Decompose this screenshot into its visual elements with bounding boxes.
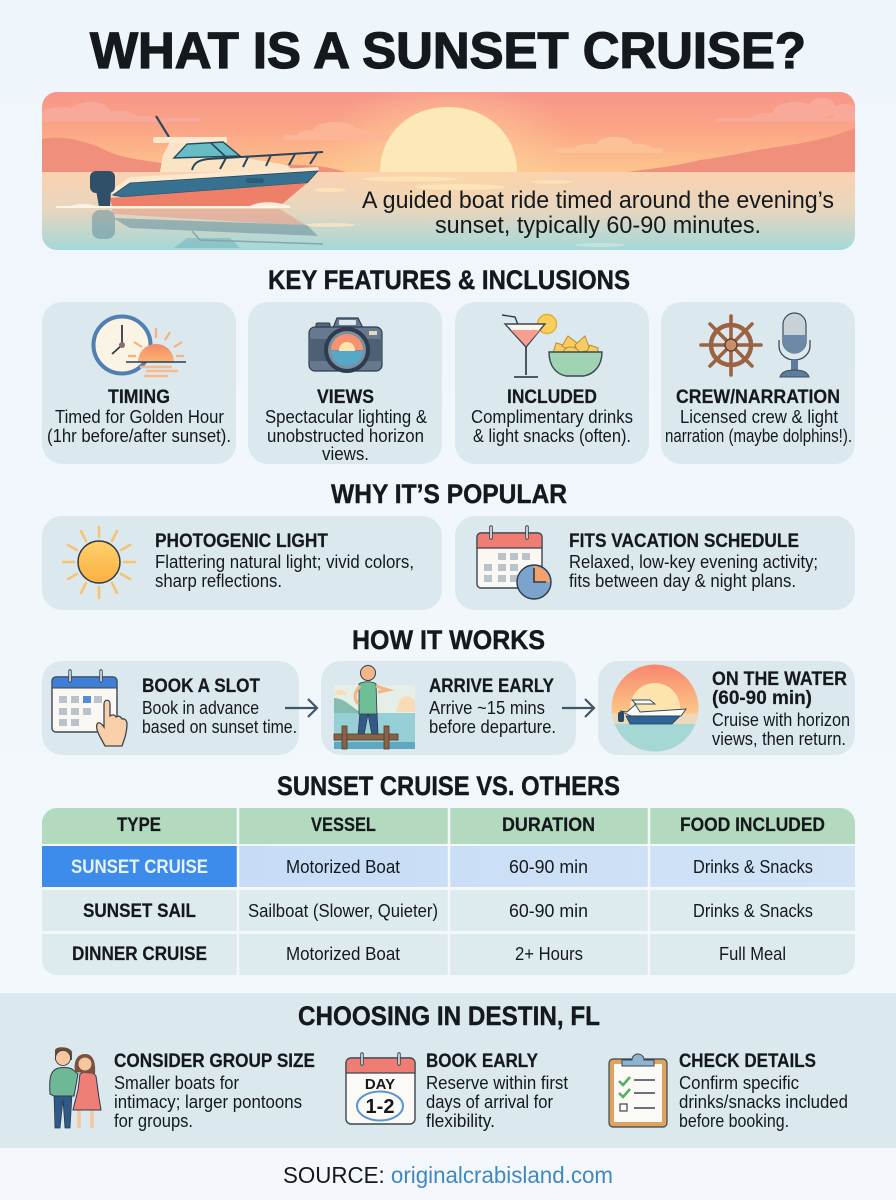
panel: photogenic light: PHOTOGENIC LIGHT bbox=[155, 531, 328, 552]
panel: fits vacation schedule: fits between day & night plans. bbox=[569, 571, 796, 591]
block: book early: days of arrival for bbox=[426, 1092, 553, 1112]
table row: sunset sail: Sailboat (Slower, Quieter) bbox=[248, 900, 438, 921]
block: book early: BOOK EARLY bbox=[426, 1051, 538, 1072]
panel: arrive early: Arrive ~15 mins bbox=[429, 698, 545, 718]
heading: why popular: WHY IT’S POPULAR bbox=[331, 479, 567, 509]
panel: arrive early: before departure. bbox=[429, 717, 556, 737]
source line: SOURCE: originalcrabisland.com bbox=[283, 1162, 613, 1188]
icon: calendar and clock bbox=[477, 527, 551, 599]
table row: sunset sail: Drinks & Snacks bbox=[693, 900, 813, 921]
panel: views: unobstructed horizon bbox=[267, 426, 424, 446]
panel: timing bbox=[42, 302, 236, 464]
panel: timing: Timed for Golden Hour bbox=[55, 407, 224, 427]
icon: calendar with pointing hand bbox=[52, 671, 127, 746]
icon: cocktail and snacks bbox=[502, 314, 602, 377]
table row: dinner cruise bbox=[72, 943, 786, 965]
table row: dinner cruise: 2+ Hours bbox=[515, 943, 583, 964]
panel: fits vacation schedule: Relaxed, low-key evening activity; bbox=[569, 552, 818, 572]
panel: fits vacation schedule: FITS VACATION SCHEDULE bbox=[569, 531, 799, 552]
panel: photogenic light bbox=[42, 516, 442, 610]
table row: sunset cruise bbox=[71, 856, 813, 878]
block: group size bbox=[50, 1047, 315, 1131]
icon: boat in sunset circle bbox=[610, 664, 700, 756]
panel: hero banner bbox=[42, 80, 859, 250]
block: check details: Confirm specific bbox=[679, 1073, 799, 1093]
icon: day 1-2 calendar bbox=[346, 1054, 415, 1124]
heading: key features: KEY FEATURES & INCLUSIONS bbox=[268, 265, 630, 295]
panel: crew and narration: Licensed crew & light bbox=[680, 407, 838, 427]
panel: on the water: (60-90 min) bbox=[712, 688, 812, 709]
heading: how it works: HOW IT WORKS bbox=[352, 625, 545, 655]
icon: clock and sunset bbox=[94, 316, 186, 376]
hero text: sunset, typically 60-90 minutes. bbox=[435, 212, 761, 239]
block: check details bbox=[609, 1051, 848, 1131]
block: book early bbox=[346, 1051, 568, 1131]
icon: clipboard checklist bbox=[609, 1054, 667, 1127]
boat reflection bbox=[92, 209, 323, 248]
panel: book a slot: based on sunset time. bbox=[142, 717, 297, 737]
panel: arrive early: ARRIVE EARLY bbox=[429, 676, 554, 697]
panel: views: VIEWS bbox=[317, 387, 374, 408]
table row: sunset cruise: Motorized Boat bbox=[286, 856, 400, 877]
icon: day 1-2 calendar: DAY bbox=[365, 1076, 395, 1093]
icon: camera bbox=[309, 318, 382, 373]
panel: arrive early bbox=[321, 661, 576, 755]
block: group size: CONSIDER GROUP SIZE bbox=[114, 1051, 315, 1072]
table row: dinner cruise: Motorized Boat bbox=[286, 943, 400, 964]
icon: ship wheel and microphone bbox=[701, 313, 810, 377]
block: check details: drinks/snacks included bbox=[679, 1092, 848, 1112]
panel: included: & light snacks (often). bbox=[473, 426, 631, 446]
block: book early: flexibility. bbox=[426, 1111, 495, 1131]
icon: sun bbox=[63, 527, 135, 598]
panel: included: INCLUDED bbox=[507, 387, 597, 408]
block: group size: Smaller boats for bbox=[114, 1073, 239, 1093]
panel: photogenic light: Flattering natural light; vivid colors, bbox=[155, 552, 414, 572]
panel: on the water: ON THE WATER bbox=[712, 669, 847, 690]
table header row: DURATION bbox=[502, 815, 595, 836]
table header row: VESSEL bbox=[311, 815, 376, 836]
panel: on the water: views, then return. bbox=[712, 729, 846, 749]
block: group size: intimacy; larger pontoons bbox=[114, 1092, 302, 1112]
hero text: A guided boat ride timed around the evening’s bbox=[362, 187, 834, 214]
panel: fits vacation schedule bbox=[455, 516, 855, 610]
panel: included: Complimentary drinks bbox=[471, 407, 633, 427]
table row: sunset sail: 60-90 min bbox=[509, 900, 588, 921]
table row: sunset cruise: 60-90 min bbox=[509, 856, 588, 877]
panel: on the water bbox=[598, 661, 855, 756]
panel: on the water: Cruise with horizon bbox=[712, 710, 850, 730]
block: check details: before booking. bbox=[679, 1111, 789, 1131]
panel: photogenic light: sharp reflections. bbox=[155, 571, 282, 591]
arrow: step one to two bbox=[285, 699, 317, 717]
table row: sunset cruise: Drinks & Snacks bbox=[693, 856, 813, 877]
arrow: step two to three bbox=[562, 699, 594, 717]
panel: views: Spectacular lighting & bbox=[265, 407, 427, 427]
block: group size: for groups. bbox=[114, 1111, 193, 1131]
hero text bbox=[362, 187, 834, 239]
heading: choosing: CHOOSING IN DESTIN, FL bbox=[298, 1001, 600, 1031]
icon: person on dock bbox=[334, 666, 415, 749]
panel: timing: TIMING bbox=[108, 387, 170, 408]
boat bbox=[56, 116, 323, 207]
block: check details: CHECK DETAILS bbox=[679, 1051, 816, 1072]
table header row bbox=[117, 815, 825, 836]
block: book early: Reserve within first bbox=[426, 1073, 568, 1093]
panel: crew and narration bbox=[661, 302, 855, 464]
panel: book a slot bbox=[42, 661, 299, 755]
table row: dinner cruise: DINNER CRUISE bbox=[72, 944, 207, 965]
table row: dinner cruise: Full Meal bbox=[719, 943, 786, 964]
table row: sunset sail: SUNSET SAIL bbox=[83, 901, 196, 922]
table row: sunset cruise: SUNSET CRUISE bbox=[71, 857, 208, 878]
panel: crew and narration: narration (maybe dolphins!). bbox=[665, 426, 852, 446]
panel: views bbox=[248, 302, 442, 464]
panel: book a slot: BOOK A SLOT bbox=[142, 676, 260, 697]
icon: day 1-2 calendar: 1-2 bbox=[366, 1096, 394, 1118]
panel: timing: (1hr before/after sunset). bbox=[47, 426, 231, 446]
panel: crew and narration: CREW/NARRATION bbox=[676, 387, 840, 408]
heading: comparison: SUNSET CRUISE VS. OTHERS bbox=[277, 771, 620, 801]
table header row: FOOD INCLUDED bbox=[680, 815, 825, 836]
comparison table bbox=[42, 808, 855, 975]
panel: choosing in Destin bbox=[0, 993, 896, 1148]
panel: included bbox=[455, 302, 649, 464]
panel: views: views. bbox=[322, 444, 369, 464]
panel: book a slot: Book in advance bbox=[142, 698, 259, 718]
table header row: TYPE bbox=[117, 815, 161, 836]
icon: couple bbox=[50, 1047, 101, 1128]
title: WHAT IS A SUNSET CRUISE? bbox=[90, 22, 806, 79]
sun bbox=[380, 107, 517, 172]
table row: sunset sail bbox=[83, 900, 813, 922]
